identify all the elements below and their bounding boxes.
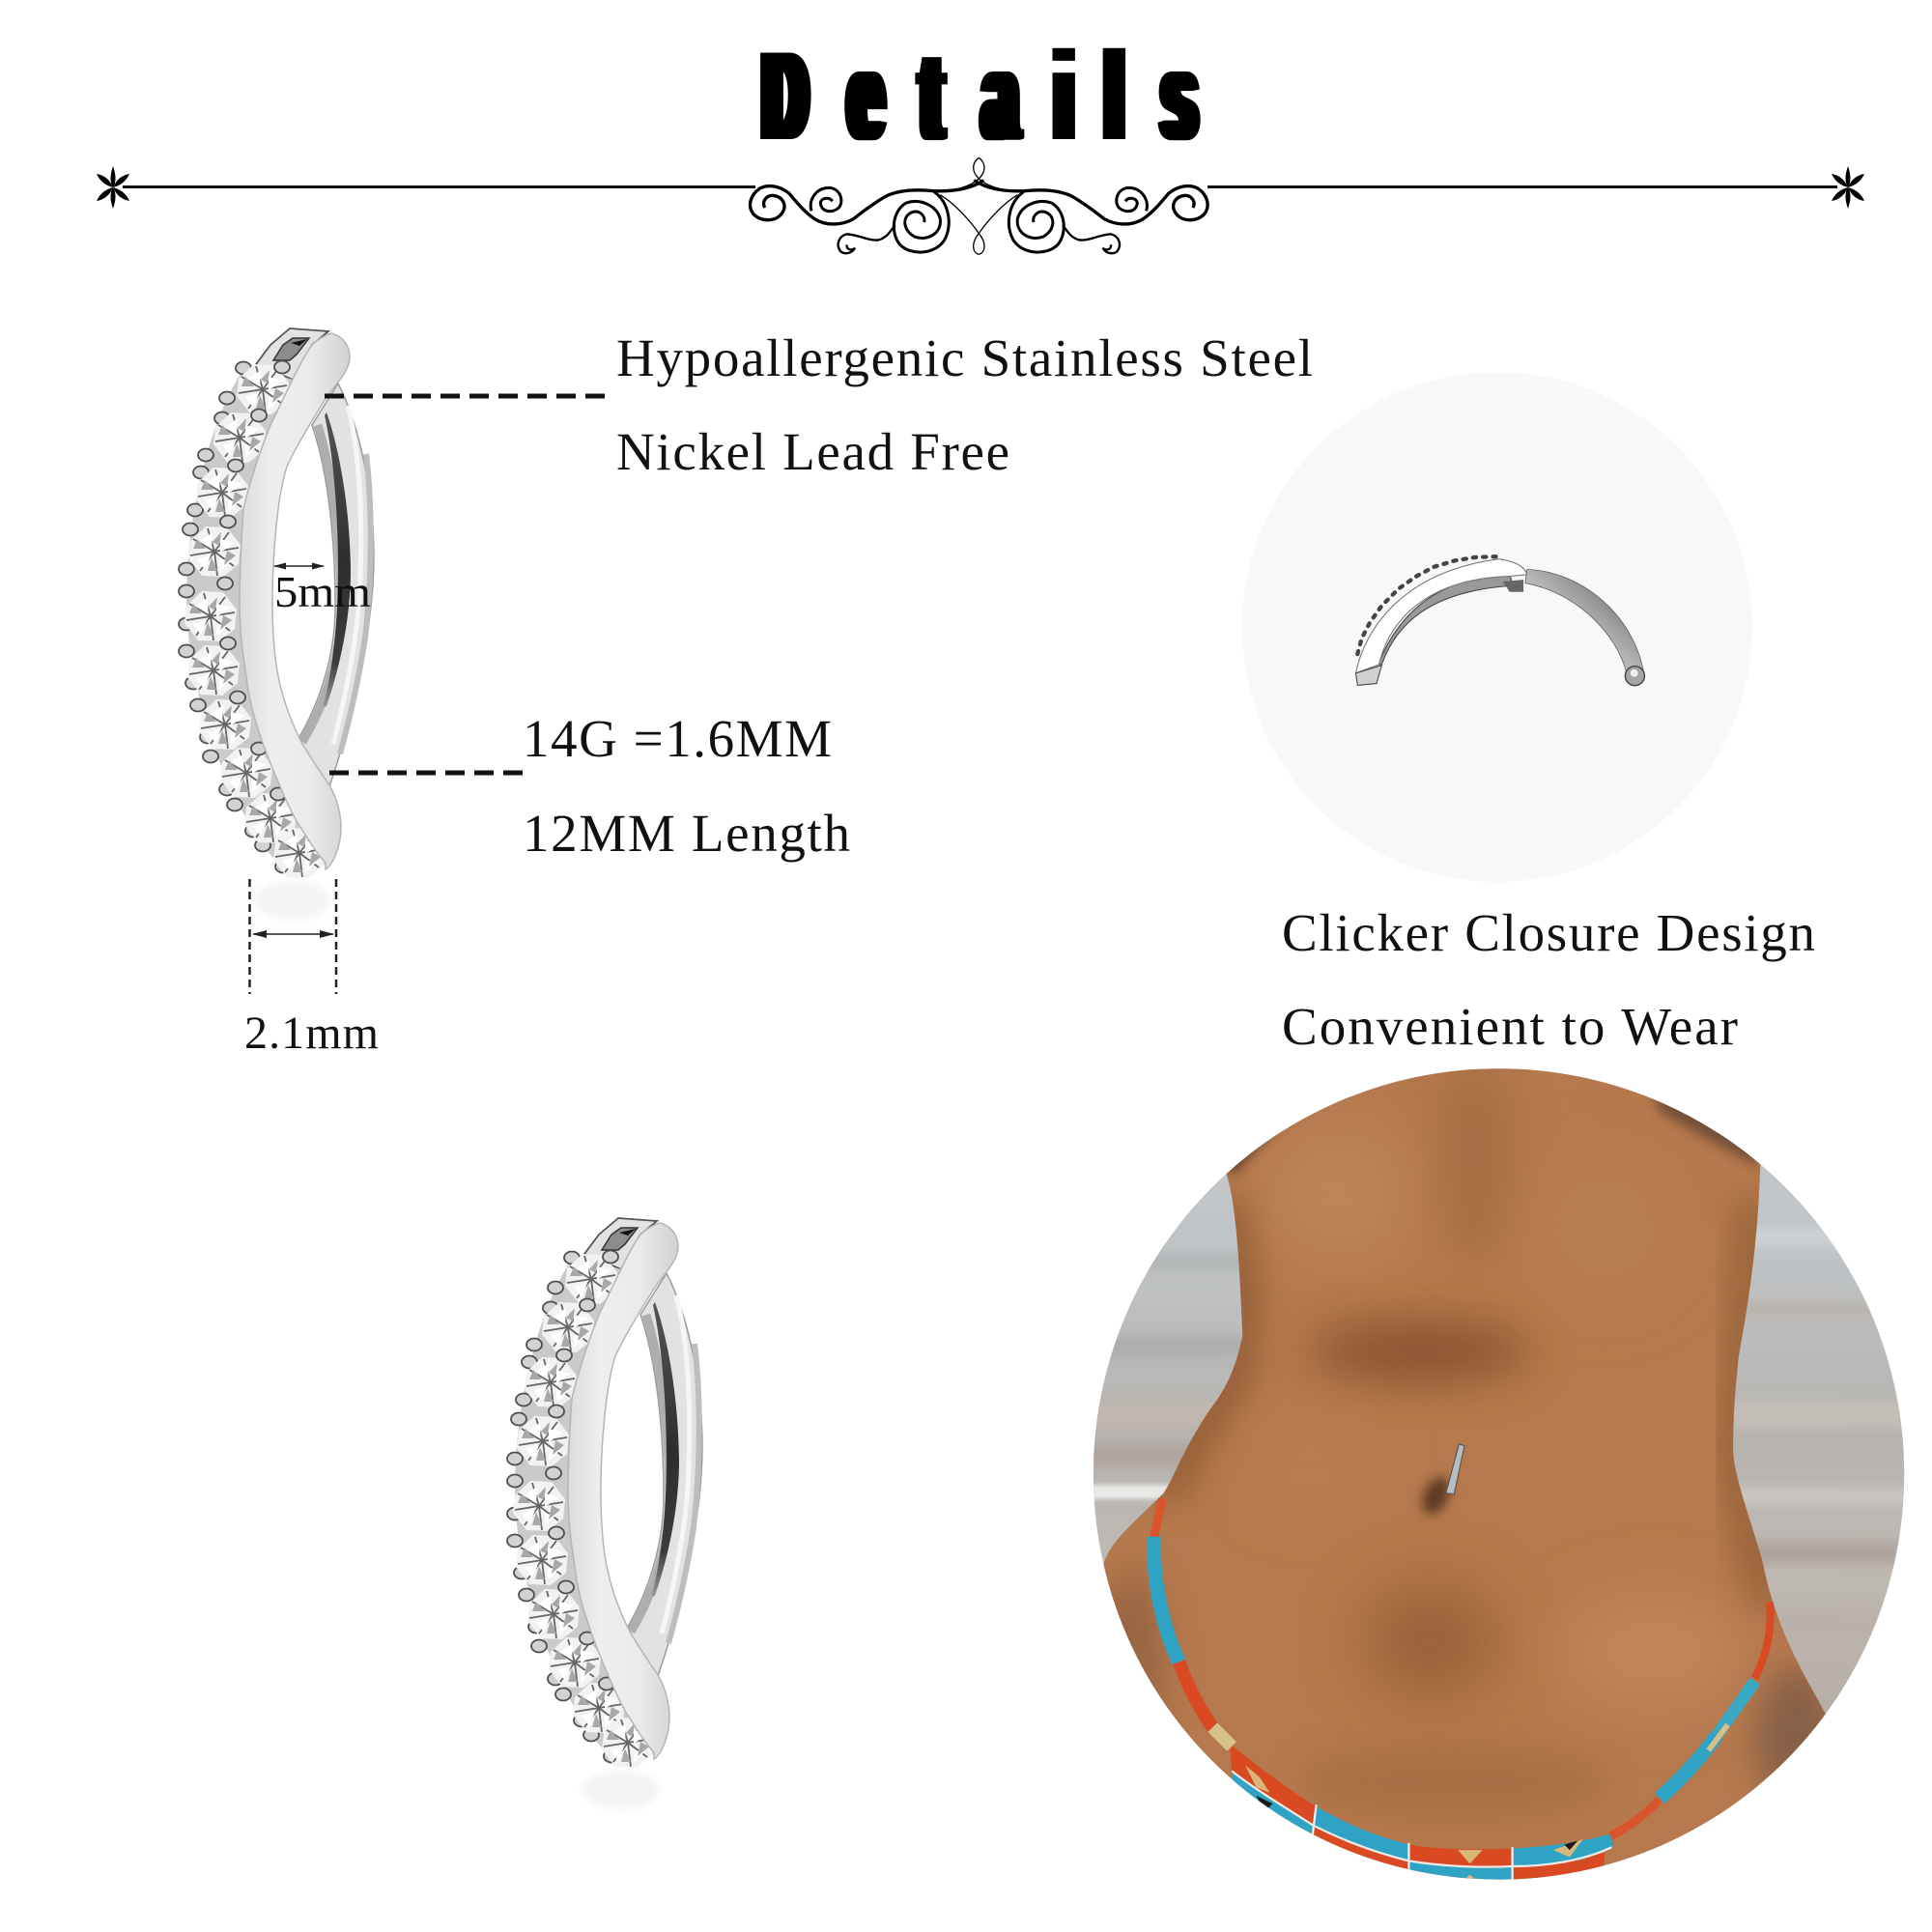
text: convenient: Convenient to Wear — [1282, 997, 1738, 1056]
panel: worn on body photo illustration — [1094, 1068, 1905, 1880]
second ring reflection — [582, 1771, 660, 1809]
title: Details — [764, 25, 1196, 166]
panel: clicker closure circle — [1242, 372, 1752, 882]
text: length: 12MM Length — [523, 804, 850, 863]
product: second ring view — [507, 1218, 702, 1768]
torso shading — [1098, 1057, 1833, 1820]
navel — [1417, 1473, 1455, 1519]
icon: left star — [97, 166, 129, 209]
product: belly ring with dimensions — [179, 328, 374, 878]
icon: opened clicker ring — [1356, 556, 1644, 686]
icon: scroll ornament — [751, 157, 1208, 254]
patterned bikini line — [1152, 1498, 1771, 1896]
water background — [1082, 1063, 1921, 1890]
text: material: Hypoallergenic Stainless Steel — [616, 328, 1313, 387]
dashed leader: material — [325, 394, 606, 398]
inner diameter arrow — [273, 562, 325, 570]
text: clicker closure: Clicker Closure Design — [1282, 903, 1815, 962]
text: gauge: 14G =1.6MM — [523, 709, 832, 768]
label: 5mm: 5mm — [274, 567, 371, 616]
divider with ornament — [97, 157, 1864, 254]
icon: right star — [1832, 166, 1864, 209]
dashed leader: gauge — [329, 771, 523, 775]
ring reflection — [254, 881, 331, 920]
width dimension marker — [249, 879, 336, 994]
small jewelry on navel — [1446, 1444, 1464, 1494]
torso — [1103, 1068, 1826, 1880]
text: nickel free: Nickel Lead Free — [616, 422, 1009, 481]
label: 2.1mm: 2.1mm — [244, 1008, 379, 1059]
